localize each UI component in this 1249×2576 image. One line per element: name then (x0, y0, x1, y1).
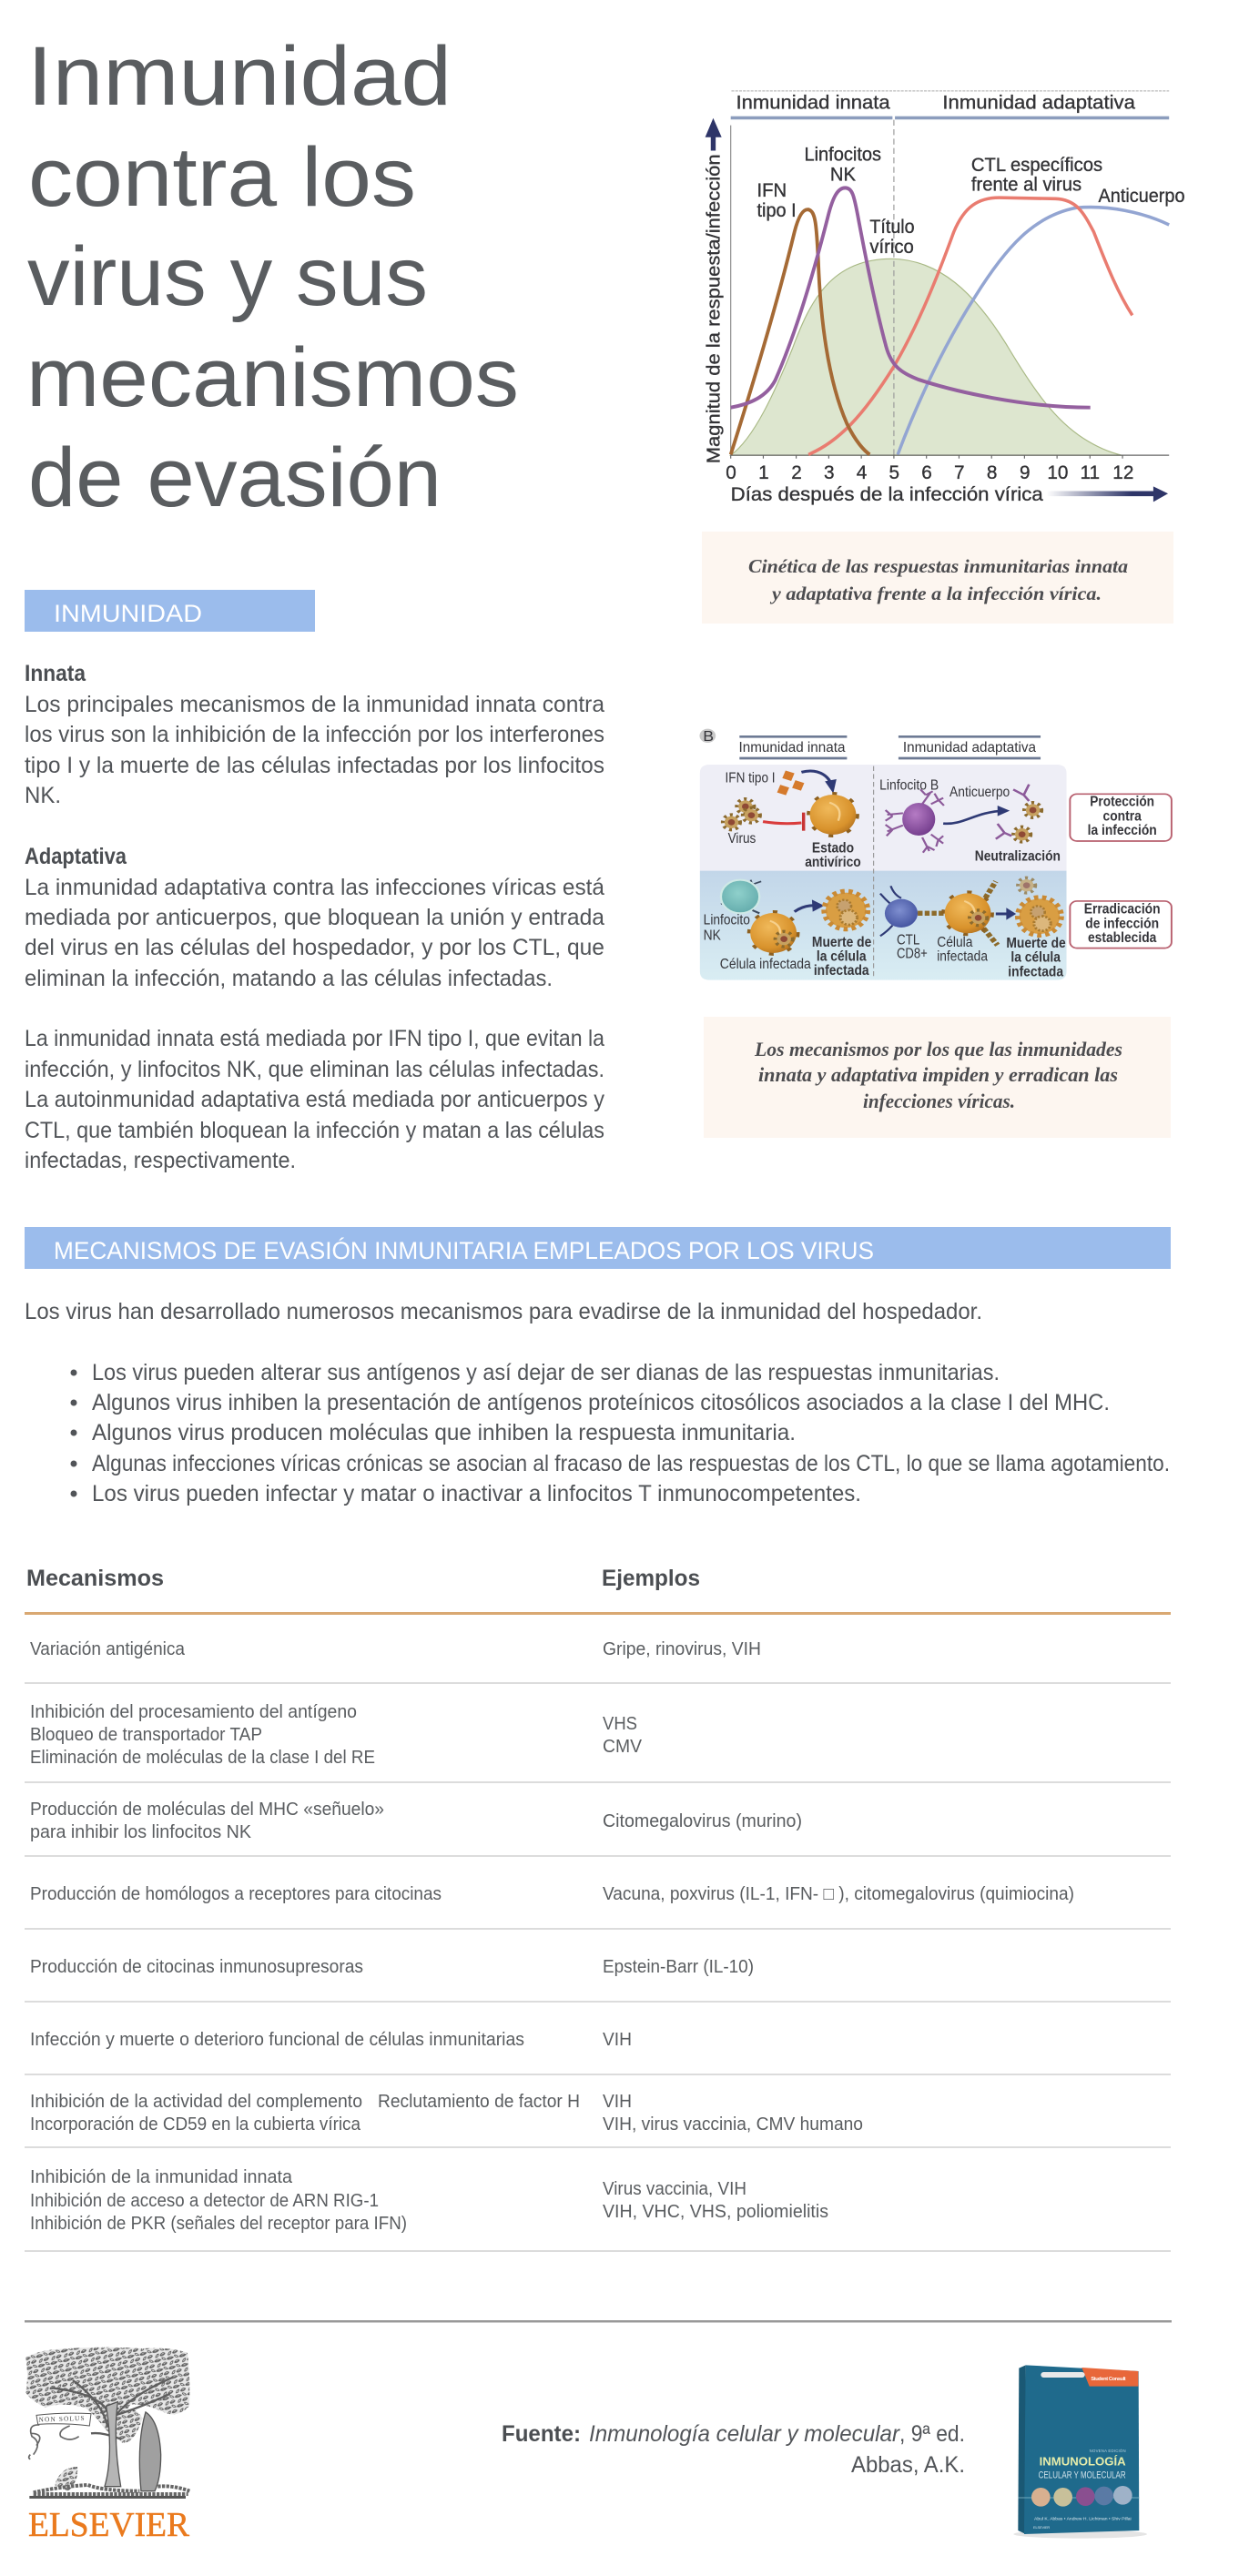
row 2: Eliminación de moléculas de la clase I del RE (30, 1748, 375, 1768)
curve: NK (731, 188, 1091, 408)
source citation: , 9ª ed. (899, 2421, 965, 2447)
caption: kinetics (702, 532, 1173, 624)
innate eradication group: la célula (817, 948, 867, 964)
row 5 (30, 1957, 754, 1977)
caption: mechanisms (704, 1017, 1171, 1138)
x axis numbers: 8 (987, 462, 997, 483)
adaptive eradication group: la célula (1010, 949, 1061, 965)
row 1: Variación antigénica (30, 1639, 186, 1659)
diagram headers: Inmunidad innata (739, 739, 846, 756)
title (26, 30, 519, 524)
source citation: Fuente: (502, 2421, 581, 2447)
source citation: Inmunología celular y molecular (589, 2421, 901, 2447)
icon: tree: NON SOLUS (38, 2414, 85, 2424)
upper band (700, 765, 1067, 871)
table: mechanisms and examples (25, 1566, 1171, 2251)
logo: Elsevier (25, 2348, 190, 2544)
innate eradication group: Linfocito (704, 912, 750, 928)
icon: book cover: NOVENA EDICIÓN (1090, 2449, 1126, 2453)
adaptive eradication group: Muerte de (1006, 935, 1066, 951)
row 8: Inhibición de PKR (señales del receptor para IFN) (30, 2214, 407, 2234)
innate eradication group: Célula infectada (720, 956, 811, 972)
bullet list: Algunos virus inhiben la presentación de antígenos proteínicos citosólicos asociados a la clase I del MHC. (92, 1390, 1110, 1415)
row 7: Incorporación de CD59 en la cubierta vírica (30, 2115, 361, 2135)
title: virus y sus (27, 230, 428, 323)
innate protection group: IFN tipo I (726, 769, 776, 786)
text block: innata: tipo I y la muerte de las células infectadas por los linfocitos (25, 753, 604, 778)
row 3: Producción de moléculas del MHC «señuelo» (30, 1800, 384, 1820)
text block: adaptativa (25, 844, 604, 991)
box: eradication (1070, 901, 1172, 948)
icon: book cover: ELSEVIER (1033, 2525, 1050, 2530)
source citation: Abbas, A.K. (851, 2452, 965, 2478)
row 2: VHS (603, 1714, 637, 1734)
box: protection: Protección (1090, 794, 1154, 809)
x axis numbers (726, 462, 1133, 483)
chart header bars (731, 91, 1169, 119)
text block: summary: infección, y linfocitos NK, que eliminan las células infectadas. (25, 1057, 604, 1082)
innate eradication group: infectada (814, 962, 869, 979)
adaptive eradication group: CTL (897, 931, 919, 948)
chart header bars: Inmunidad innata (736, 92, 890, 114)
text block: innata: los virus son la inhibición de la infección por los interferones (25, 722, 604, 747)
curve labels (757, 144, 1185, 258)
row 8 (30, 2167, 828, 2234)
adaptive eradication group: Célula (937, 934, 973, 950)
row 2 (30, 1702, 643, 1768)
curve: IFN (731, 209, 869, 454)
box: protection: contra (1103, 807, 1142, 824)
curve labels: tipo I (757, 200, 797, 221)
x axis numbers: 12 (1112, 462, 1133, 483)
adaptive protection group: Anticuerpo (949, 784, 1010, 800)
curve labels: frente al virus (971, 174, 1081, 196)
caption: mechanisms: innata y adaptativa impiden y erradican las (758, 1063, 1118, 1086)
chart axes (731, 120, 1169, 459)
x axis numbers: 5 (889, 462, 899, 483)
innate protection group: Virus (728, 830, 756, 847)
box: eradication: establecida (1088, 929, 1157, 946)
y axis label: Magnitud de la respuesta/infección (704, 154, 724, 463)
title: Inmunidad (27, 30, 452, 123)
section heading: inmunidad: INMUNIDAD (54, 600, 202, 627)
row 5: Epstein-Barr (IL-10) (603, 1957, 754, 1977)
table header (25, 1566, 1171, 1615)
intro text: Los virus han desarrollado numerosos mecanismos para evadirse de la inmunidad del hospedador. (25, 1299, 982, 1324)
row 7: VIH, virus vaccinia, CMV humano (603, 2115, 863, 2135)
caption: kinetics: Cinética de las respuestas inmunitarias innata (748, 555, 1128, 577)
x axis numbers: 11 (1081, 462, 1100, 483)
innate eradication group: Muerte de (812, 934, 871, 950)
source citation (502, 2421, 965, 2478)
row 6: VIH (603, 2030, 632, 2050)
title: de evasión (28, 431, 442, 524)
row 7: VIH (603, 2092, 632, 2112)
icon: book cover (1013, 2365, 1147, 2539)
curve labels: Título (869, 217, 915, 238)
text block: adaptativa: mediada por anticuerpos, que bloquean la unión y entrada (25, 905, 604, 930)
x axis numbers: 7 (954, 462, 965, 483)
box: eradication: Erradicación (1084, 901, 1161, 917)
viral titer area (731, 259, 1122, 455)
icon: tree (25, 2348, 189, 2499)
innate protection group: Estado (812, 840, 854, 856)
bullet list (71, 1360, 1170, 1506)
x axis numbers: 2 (791, 462, 802, 483)
curve: antibody (898, 208, 1169, 454)
x axis numbers: 9 (1020, 462, 1031, 483)
curve: CTL (808, 198, 1132, 454)
text block: adaptativa: La inmunidad adaptativa contra las infecciones víricas está (25, 875, 604, 900)
row 4 (30, 1884, 1074, 1904)
icon: book cover: Student Consult (1091, 2377, 1126, 2382)
curve labels: Linfocitos (804, 144, 881, 166)
adaptive eradication group: CD8+ (897, 946, 928, 961)
curve labels: NK (830, 164, 856, 186)
row 1: Gripe, rinovirus, VIH (603, 1639, 761, 1659)
curve labels: vírico (869, 237, 914, 258)
row 4: Producción de homólogos a receptores para citocinas (30, 1884, 442, 1904)
row 2: Bloqueo de transportador TAP (30, 1725, 262, 1745)
bullet list: Los virus pueden infectar y matar o inactivar a linfocitos T inmunocompetentes. (92, 1481, 861, 1506)
x axis arrow (1047, 486, 1168, 502)
x axis numbers: 0 (726, 462, 736, 483)
badge B (699, 728, 716, 745)
text block: adaptativa: Adaptativa (25, 844, 127, 869)
row 8: Inhibición de la inmunidad innata (30, 2167, 293, 2187)
x axis numbers: 4 (857, 462, 868, 483)
x axis numbers: 3 (824, 462, 835, 483)
table header: Ejemplos (602, 1566, 700, 1591)
panel: mechanisms diagram (699, 728, 1172, 980)
adaptive protection group: Linfocito B (879, 776, 939, 793)
row 3: para inhibir los linfocitos NK (30, 1822, 252, 1842)
adaptive eradication group: infectada (1008, 963, 1064, 979)
curve labels: CTL específicos (971, 155, 1102, 176)
row 8: Virus vaccinia, VIH (603, 2179, 746, 2199)
x axis numbers: 10 (1047, 462, 1068, 483)
panel: kinetics chart (704, 91, 1185, 505)
adaptive eradication group (880, 878, 1066, 979)
box: protection (1070, 794, 1172, 841)
lower band (700, 871, 1067, 980)
text block: innata: Innata (25, 661, 86, 686)
chart header bars: Inmunidad adaptativa (942, 92, 1135, 114)
caption: kinetics: y adaptativa frente a la infección vírica. (769, 583, 1102, 604)
adaptive eradication group: infectada (937, 948, 989, 964)
title: mecanismos (26, 331, 519, 424)
row 7: Reclutamiento de factor H (378, 2092, 580, 2112)
diagram headers: Inmunidad adaptativa (903, 739, 1037, 756)
bullet list: Los virus pueden alterar sus antígenos y así dejar de ser dianas de las respuestas inmunitarias. (92, 1360, 1000, 1385)
text block: summary: La inmunidad innata está mediada por IFN tipo I, que evitan la (25, 1026, 604, 1051)
wordmark: ELSEVIER (28, 2506, 190, 2544)
row 2: CMV (603, 1737, 643, 1757)
text block: innata: NK. (25, 783, 61, 808)
row 8: VIH, VHC, VHS, poliomielitis (603, 2202, 828, 2222)
bullet list: Algunos virus producen moléculas que inhiben la respuesta inmunitaria. (92, 1420, 796, 1445)
row 1 (30, 1639, 761, 1659)
text block: summary: La autoinmunidad adaptativa está mediada por anticuerpos y (25, 1087, 604, 1112)
x axis numbers: 6 (921, 462, 932, 483)
curve labels: IFN (757, 180, 787, 201)
y axis arrow (706, 118, 722, 150)
row 3: Citomegalovirus (murino) (603, 1811, 802, 1831)
row 7 (30, 2092, 863, 2135)
text block: innata: Los principales mecanismos de la inmunidad innata contra (25, 692, 604, 717)
x axis numbers: 1 (758, 462, 769, 483)
adaptive protection group (879, 776, 1061, 864)
row 3 (30, 1800, 802, 1842)
section heading: evasion: MECANISMOS DE EVASIÓN INMUNITARIA EMPLEADOS POR LOS VIRUS (54, 1236, 874, 1264)
innate protection group: antivírico (805, 854, 861, 870)
curve labels: Anticuerpo (1099, 186, 1185, 207)
text block: innata (25, 661, 604, 808)
icon: book cover: INMUNOLOGÍA (1040, 2454, 1126, 2468)
x axis label: Días después de la infección vírica (731, 484, 1043, 505)
text block: summary: CTL, que también bloquean la infección y matan a las células (25, 1118, 604, 1143)
text block: summary (25, 1026, 604, 1173)
box: eradication: de infección (1085, 915, 1159, 931)
innate eradication group: NK (704, 927, 721, 943)
text block: adaptativa: eliminan la infección, matando a las células infectadas. (25, 966, 553, 991)
section heading: inmunidad (25, 590, 315, 632)
table header: Mecanismos (26, 1566, 164, 1591)
badge B: B (703, 728, 714, 745)
caption: mechanisms: infecciones víricas. (863, 1090, 1015, 1112)
diagram headers (739, 736, 1041, 758)
icon: book cover: CELULAR Y MOLECULAR (1039, 2470, 1126, 2480)
section heading: evasion (25, 1227, 1171, 1269)
row 5: Producción de citocinas inmunosupresoras (30, 1957, 363, 1977)
innate eradication group (704, 880, 871, 979)
text block: adaptativa: del virus en las células del hospedador, y por los CTL, que (25, 935, 604, 960)
caption: mechanisms: Los mecanismos por los que las inmunidades (754, 1038, 1122, 1060)
row 2: Inhibición del procesamiento del antígeno (30, 1702, 357, 1722)
icon: book cover: Abul K. Abbas • Andrew H. Lichtman • Shiv Pillai (1034, 2516, 1132, 2521)
innate protection group (723, 769, 861, 870)
bullet list: Algunas infecciones víricas crónicas se asocian al fracaso de las respuestas de los CTL, lo que se llama agotamiento. (92, 1451, 1170, 1476)
row 8: Inhibición de acceso a detector de ARN RIG-1 (30, 2191, 379, 2211)
text block: summary: infectadas, respectivamente. (25, 1148, 296, 1173)
row 7: Inhibición de la actividad del complemento (30, 2092, 362, 2112)
row 6: Infección y muerte o deterioro funcional de células inmunitarias (30, 2030, 524, 2050)
adaptive protection group: Neutralización (975, 848, 1061, 864)
box: protection: la infección (1088, 822, 1157, 838)
row 4: Vacuna, poxvirus (IL-1, IFN- □ ), citomegalovirus (quimiocina) (603, 1884, 1074, 1904)
title: contra los (28, 131, 416, 224)
